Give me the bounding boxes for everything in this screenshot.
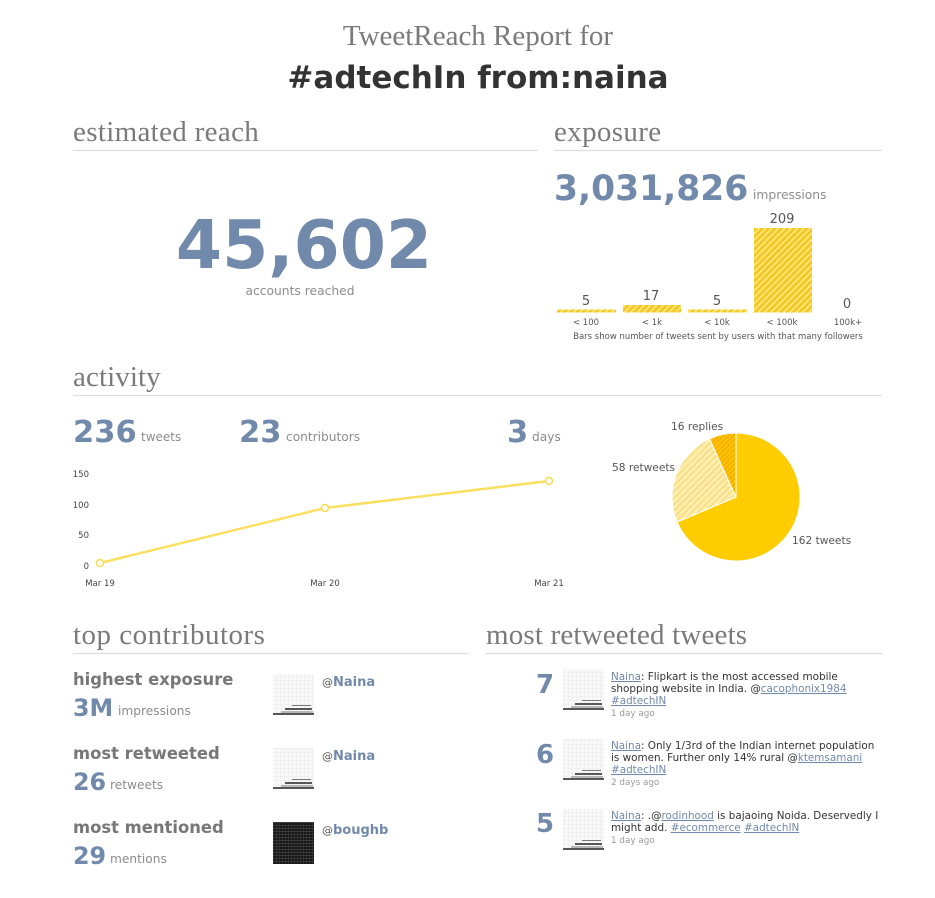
- bar chart: tweets by follower count: 17: [643, 289, 659, 304]
- stat: contributors: 23: [239, 415, 281, 450]
- pie chart: tweet types: 162 tweets: [792, 535, 851, 547]
- tweet 1: 7: [536, 670, 554, 700]
- stat: contributors: contributors: [286, 430, 360, 444]
- tweet 3: 5: [536, 809, 554, 839]
- tweet 1: 1 day ago: [611, 709, 655, 719]
- tweet 3: might add. #ecommerce #adtechIN: [611, 822, 799, 834]
- panel: activity: [73, 361, 882, 589]
- bar chart: tweets by follower count: < 10k: [704, 318, 730, 328]
- title: #adtechIn from:naina: [287, 60, 669, 96]
- line chart: tweets per day: 150: [73, 470, 89, 480]
- impressions caption: impressions: [753, 188, 827, 202]
- tweet 2: 2 days ago: [611, 778, 659, 788]
- contributor: most retweeted: 26: [73, 768, 106, 796]
- tweet 1: [536, 669, 847, 719]
- stat: days: [507, 415, 561, 450]
- tweet 1: Naina: Flipkart is the most accessed mobile: [611, 671, 838, 683]
- stat: contributors: [239, 415, 360, 450]
- panel: most retweeted tweets: [486, 619, 882, 850]
- stat: tweets: tweets: [141, 430, 181, 444]
- tweet 2: Naina: Only 1/3rd of the Indian internet population: [611, 740, 874, 752]
- tweet 2: #adtechIN: [611, 764, 666, 776]
- contributor: most retweeted: [73, 744, 375, 796]
- stat: days: 3: [507, 415, 528, 450]
- heading: exposure: exposure: [554, 116, 662, 148]
- tweet 3: 1 day ago: [611, 836, 655, 846]
- tweet 3: [536, 809, 878, 850]
- panel: estimated reach: [73, 116, 538, 298]
- bar chart: tweets by follower count: 5: [713, 294, 721, 309]
- bar chart: tweets by follower count: Bars show number of tweets sent by users with that many followers: [573, 332, 863, 342]
- tweet 2: is women. Further only 14% rural @ktemsamani: [611, 752, 862, 764]
- heading: activity: activity: [73, 361, 161, 393]
- contributor: highest exposure: Naina: [333, 675, 375, 690]
- line chart: tweets per day: [73, 470, 564, 589]
- panel: top contributors: [73, 619, 469, 870]
- pie chart: tweet types: 16 replies: [671, 421, 723, 433]
- contributor: most retweeted: retweets: [110, 778, 163, 792]
- heading: estimated reach: estimated reach: [73, 116, 259, 148]
- pie chart: tweet types: [612, 421, 851, 561]
- line chart: tweets per day: 0: [84, 562, 89, 572]
- contributor: most mentioned: most mentioned: [73, 818, 224, 837]
- contributor: most mentioned: [73, 818, 388, 870]
- contributor: most mentioned: mentions: [110, 852, 167, 866]
- bar chart: tweets by follower count: 0: [843, 297, 851, 312]
- contributor: most retweeted: @: [322, 750, 333, 763]
- heading: top contributors: top contributors: [73, 619, 265, 651]
- pie chart: tweet types: 58 retweets: [612, 462, 675, 474]
- contributor: highest exposure: 3M: [73, 694, 113, 722]
- contributor: highest exposure: impressions: [118, 704, 191, 718]
- line chart: tweets per day: 50: [78, 531, 89, 541]
- bar chart: tweets by follower count: [557, 212, 863, 342]
- contributor: highest exposure: [73, 670, 375, 722]
- contributor: most retweeted: Naina: [333, 749, 375, 764]
- tweet 1: shopping website in India. @cacophonix1984: [611, 683, 847, 695]
- tweet 1: #adtechIN: [611, 695, 666, 707]
- tweet 2: 6: [536, 740, 554, 770]
- bar chart: tweets by follower count: < 100k: [767, 318, 798, 328]
- contributor: most mentioned: 29: [73, 842, 106, 870]
- bar chart: tweets by follower count: < 100: [573, 318, 599, 328]
- stat: tweets: [73, 415, 181, 450]
- reach caption: accounts reached: [245, 284, 355, 298]
- contributor: highest exposure: highest exposure: [73, 670, 233, 689]
- bar chart: tweets by follower count: 209: [770, 212, 794, 227]
- line chart: tweets per day: Mar 20: [310, 579, 340, 589]
- tweet 3: Naina: .@rodinhood is bajaoing Noida. Deservedly I: [611, 810, 878, 822]
- panel: exposure: [554, 116, 882, 342]
- contributor: highest exposure: @: [322, 676, 333, 689]
- stat: tweets: 236: [73, 415, 137, 450]
- heading: most retweeted tweets: most retweeted tweets: [486, 619, 747, 651]
- reach number: 45,602: [176, 206, 432, 284]
- title: TweetReach Report for: [343, 20, 613, 52]
- bar chart: tweets by follower count: 100k+: [834, 318, 862, 328]
- line chart: tweets per day: Mar 19: [85, 579, 115, 589]
- stat: days: days: [532, 430, 561, 444]
- contributor: most mentioned: boughb: [333, 823, 388, 838]
- contributor: most mentioned: @: [322, 824, 333, 837]
- impressions number: 3,031,826: [554, 169, 748, 209]
- bar chart: tweets by follower count: 5: [582, 294, 590, 309]
- line chart: tweets per day: 100: [73, 501, 89, 511]
- tweet 2: [536, 739, 874, 788]
- line chart: tweets per day: Mar 21: [534, 579, 564, 589]
- contributor: most retweeted: most retweeted: [73, 744, 220, 763]
- title: [287, 20, 669, 96]
- bar chart: tweets by follower count: < 1k: [642, 318, 662, 328]
